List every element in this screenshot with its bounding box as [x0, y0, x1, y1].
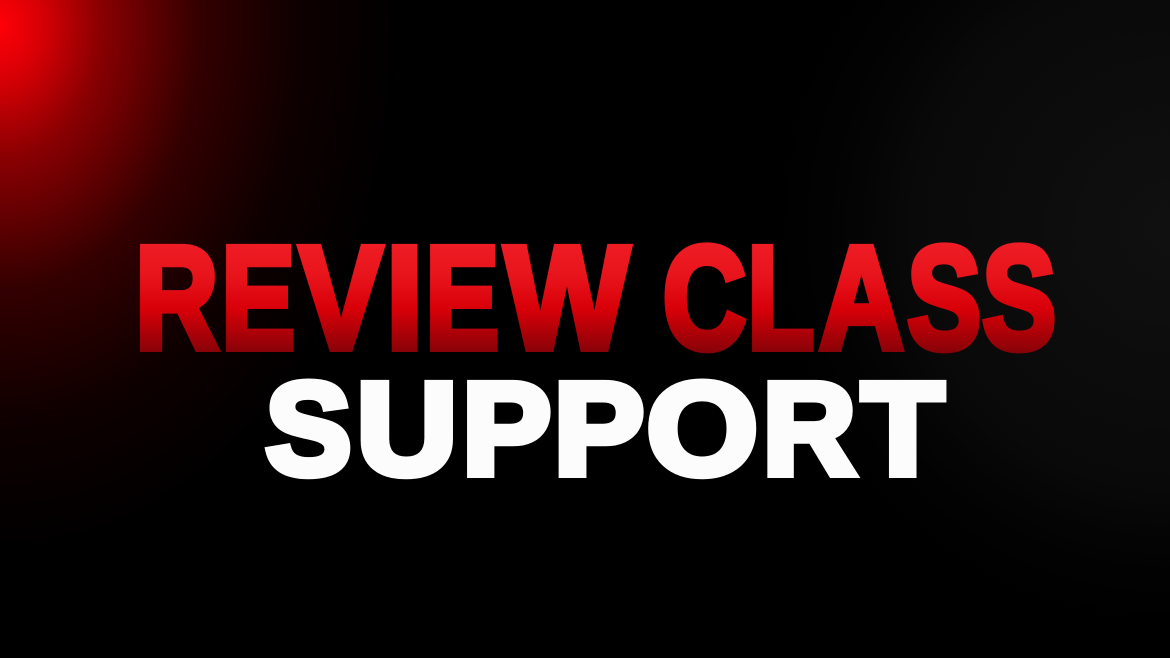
heading: REVIEW CLASS: E — [425, 216, 499, 380]
heading: REVIEW CLASS: A — [819, 216, 904, 380]
heading: REVIEW CLASS: E — [221, 216, 295, 380]
heading: REVIEW CLASS: L — [747, 216, 814, 380]
heading: REVIEW CLASS: C — [662, 216, 746, 380]
heading: SUPPORT: O — [647, 355, 758, 502]
heading: SUPPORT: S — [266, 355, 351, 502]
heading: SUPPORT: R — [763, 355, 856, 502]
heading: REVIEW CLASS: I — [386, 216, 423, 380]
heading: REVIEW CLASS: V — [299, 216, 383, 380]
heading: REVIEW CLASS: S — [982, 216, 1056, 380]
heading: SUPPORT: T — [862, 355, 944, 502]
heading: REVIEW CLASS: R — [135, 216, 218, 380]
heading: SUPPORT: P — [554, 355, 644, 502]
heading: SUPPORT: P — [462, 355, 551, 502]
heading: SUPPORT: U — [357, 355, 457, 502]
heading: REVIEW CLASS: W — [505, 216, 630, 380]
heading: REVIEW CLASS: S — [907, 216, 981, 380]
